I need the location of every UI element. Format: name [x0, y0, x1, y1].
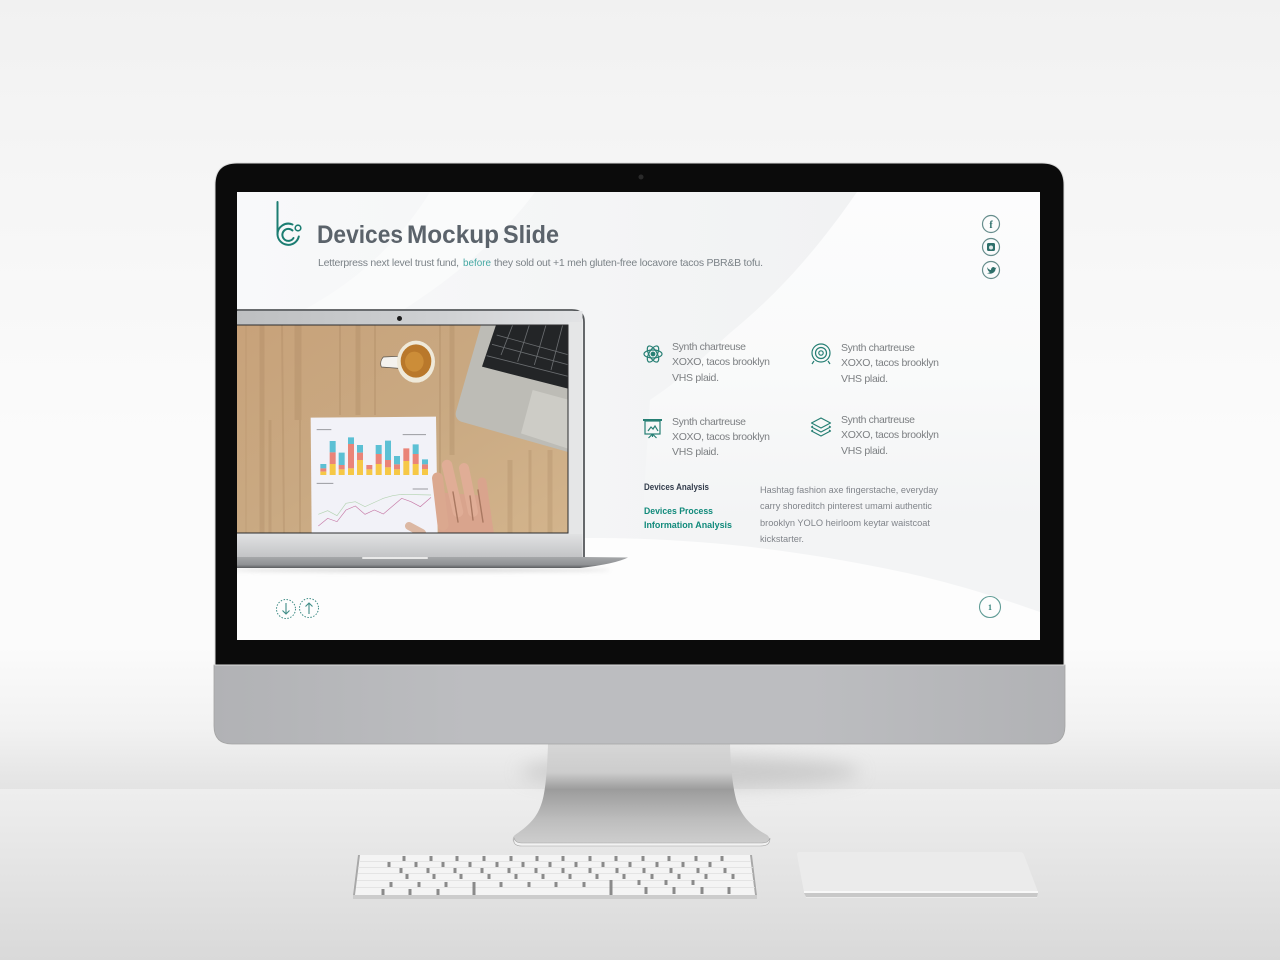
- icon: instagram: [982, 238, 1000, 256]
- logo: [277, 202, 301, 245]
- feature: atom: [644, 341, 770, 384]
- heading: devices analysis: Devices Analysis: [644, 482, 709, 493]
- feature: target: [812, 342, 939, 385]
- coffee cup: [381, 341, 435, 383]
- everything below uses coordinates of 3x crop: [311, 325, 569, 533]
- laptop top bezel: [237, 311, 582, 325]
- photo on laptop screen: [237, 325, 569, 535]
- icon: down arrow button: [276, 600, 296, 618]
- icon: layers: [812, 418, 830, 436]
- feature text: Synth chartreuse: [841, 342, 915, 354]
- feature: layers: [812, 414, 939, 457]
- paragraph: carry shoreditch pinterest umami authentic: [760, 501, 932, 512]
- paragraph: brooklyn YOLO heirloom keytar waistcoat: [760, 518, 930, 529]
- hand: [409, 465, 494, 534]
- slide screen: [230, 192, 1040, 640]
- wood grain: [246, 325, 550, 535]
- line chart: [318, 494, 431, 516]
- laptop mockup: [230, 310, 628, 572]
- links: process and information: Information Analysis: [644, 520, 732, 531]
- feature text: Synth chartreuse: [672, 416, 746, 428]
- feature text: VHS plaid.: [672, 446, 719, 458]
- subtitle: they sold out +1 meh gluten-free locavore tacos PBR&B tofu.: [494, 257, 763, 269]
- feature text: Synth chartreuse: [841, 414, 915, 426]
- small laptop in photo: [456, 325, 569, 452]
- icon: target: [812, 344, 830, 364]
- keyboard: [353, 855, 757, 899]
- title: Slide: [503, 221, 559, 249]
- icon: atom: [644, 344, 662, 364]
- laptop base: [237, 557, 628, 568]
- feature text: VHS plaid.: [672, 372, 719, 384]
- stacked bars: [320, 437, 428, 475]
- page number: [980, 596, 1000, 618]
- feature text: VHS plaid.: [841, 445, 888, 457]
- subtitle: Letterpress next level trust fund,: [318, 257, 459, 269]
- feature text: XOXO, tacos brooklyn: [672, 431, 770, 443]
- feature text: XOXO, tacos brooklyn: [841, 357, 939, 369]
- feature: presentation: [643, 416, 770, 458]
- icon: facebook: f: [989, 220, 993, 231]
- title: Mockup: [407, 221, 499, 249]
- laptop lid: [237, 310, 584, 558]
- subtitle: before: [463, 257, 491, 269]
- laptop screen border: [237, 325, 568, 533]
- feature text: VHS plaid.: [841, 373, 888, 385]
- laptop base shadow: [230, 568, 610, 572]
- feature text: XOXO, tacos brooklyn: [841, 429, 939, 441]
- key gaps: [383, 856, 733, 895]
- laptop camera: [397, 316, 402, 321]
- laptop notch: [362, 557, 428, 559]
- title: Devices: [317, 221, 403, 249]
- monitor black bezel: [215, 163, 1064, 665]
- links: process and information: Devices Process: [644, 506, 713, 517]
- paragraph: Hashtag fashion axe fingerstache, everyday: [760, 485, 938, 496]
- feature text: Synth chartreuse: [672, 341, 746, 353]
- icon: presentation board: [643, 420, 662, 438]
- chart labels: [317, 430, 428, 489]
- monitor chin: [214, 665, 1065, 744]
- paper with charts: [311, 417, 438, 533]
- paragraph: kickstarter.: [760, 534, 804, 545]
- monitor stand: [513, 744, 770, 846]
- camera: [638, 174, 644, 180]
- laptop side bezel: [568, 322, 582, 534]
- social icons: [982, 216, 1000, 278]
- background swooshes: [497, 192, 1040, 640]
- laptop bottom bezel: [237, 533, 582, 557]
- icon: twitter: [982, 262, 1000, 278]
- trackpad: [797, 852, 1038, 898]
- icon: up arrow button: [300, 598, 318, 618]
- page number: 1: [988, 603, 992, 612]
- feature text: XOXO, tacos brooklyn: [672, 356, 770, 368]
